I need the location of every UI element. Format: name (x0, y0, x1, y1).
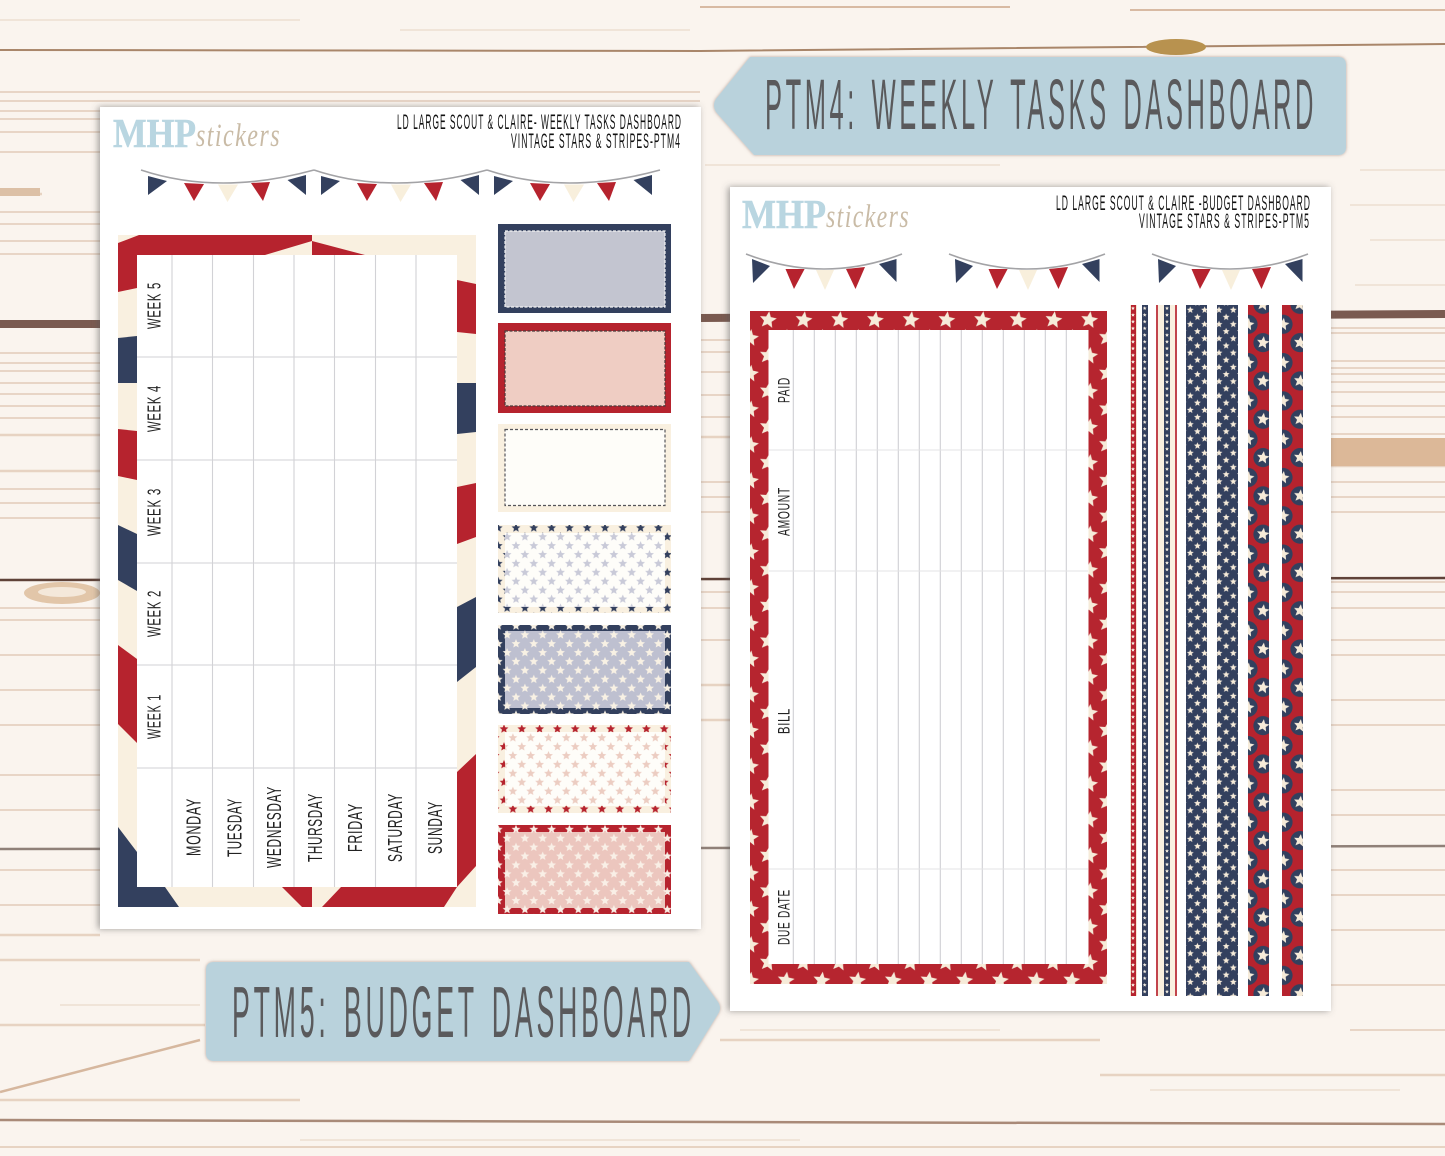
week labels: WEEK 3 (144, 488, 164, 536)
washi strip: navy stars one (1186, 305, 1207, 996)
washi strip: red circles one (1248, 305, 1269, 996)
infographic canvas: PTM5: BUDGET DASHBOARD (232, 973, 695, 1053)
infographic canvas: LD LARGE SCOUT & CLAIRE- WEEKLY TASKS DASHBOARD (397, 111, 682, 134)
label box: cream with red stars (498, 725, 671, 813)
column labels (774, 377, 794, 945)
week labels: WEEK 4 (144, 385, 164, 432)
weekday labels: MONDAY (184, 798, 206, 856)
washi strips: thin dotted (1130, 305, 1177, 996)
tag: PTM5 title arrow (206, 962, 720, 1061)
washi strip: red circles two (1282, 305, 1303, 996)
logo: MHP stickers: MHP (113, 110, 196, 156)
budget table with star frame (750, 311, 1107, 984)
weekday labels: TUESDAY (224, 798, 246, 857)
label box: navy stitched (498, 224, 671, 313)
logo: MHP stickers: stickers (196, 118, 281, 154)
logo: MHP stickers (742, 191, 910, 237)
week labels: WEEK 2 (144, 590, 164, 637)
weekday labels: WEDNESDAY (264, 786, 286, 868)
label box: cream stitched (498, 424, 671, 512)
logo: MHP stickers (113, 110, 281, 156)
panel: PTM4 weekly tasks sheet (100, 107, 701, 929)
bunting banners (746, 254, 1308, 290)
week labels (144, 282, 164, 739)
weekday labels: FRIDAY (345, 803, 367, 852)
column labels: PAID (774, 377, 794, 403)
weekday labels: SUNDAY (425, 801, 447, 854)
weekday labels: SATURDAY (385, 793, 407, 862)
washi strip: navy stars two (1217, 305, 1238, 996)
sheet heading (1056, 192, 1311, 233)
sheet heading (397, 111, 682, 153)
label box: red with cream stars (498, 825, 671, 914)
column labels: DUE DATE (774, 889, 794, 945)
weekday labels (184, 786, 447, 868)
infographic canvas: VINTAGE STARS & STRIPES-PTM4 (511, 130, 681, 153)
label box: navy with cream stars (498, 625, 671, 714)
panel: PTM5 budget sheet (730, 187, 1331, 1011)
logo: MHP stickers: stickers (826, 199, 910, 235)
week labels: WEEK 1 (144, 694, 164, 739)
weekday labels: THURSDAY (305, 793, 327, 862)
logo: MHP stickers: MHP (742, 191, 826, 237)
label box: red stitched (498, 323, 671, 413)
week labels: WEEK 5 (144, 282, 164, 329)
tag: PTM4 title arrow (714, 57, 1346, 155)
column labels: BILL (774, 708, 794, 734)
column labels: AMOUNT (774, 487, 794, 536)
bunting banner (141, 170, 660, 202)
label box: cream with navy stars (498, 525, 671, 613)
weekly tasks grid with vintage stripe frame (118, 235, 476, 907)
